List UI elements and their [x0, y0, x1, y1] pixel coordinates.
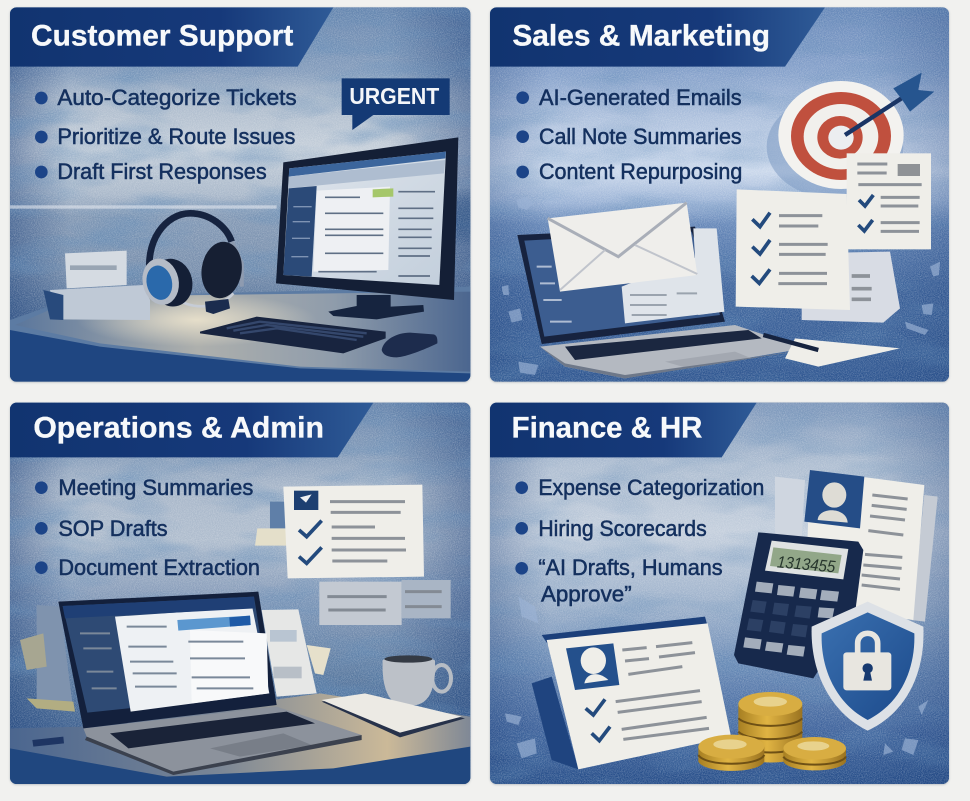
title: Customer Support — [31, 20, 294, 53]
icon: shield with padlock — [812, 602, 924, 731]
icon: pen — [763, 335, 818, 350]
icon: resume document — [775, 470, 938, 622]
icon: calculator: 1313455 — [776, 552, 837, 576]
icon: mouse — [382, 333, 437, 357]
panel: Customer Support — [10, 7, 490, 382]
title: Finance & HR — [512, 411, 702, 444]
bullet list: Draft First Responses — [57, 159, 267, 184]
icon: monitor — [276, 137, 458, 319]
icon: small checklist card — [847, 153, 931, 249]
bullet list: Prioritize & Route Issues — [57, 124, 295, 149]
bullet list: Approve” — [541, 582, 632, 607]
bullet list — [515, 475, 764, 607]
bullet list: Auto-Categorize Tickets — [57, 85, 297, 110]
stacked boxes — [43, 251, 150, 320]
panel: Operations & Admin — [10, 403, 470, 784]
bullet list — [516, 85, 742, 184]
header banner — [490, 403, 757, 457]
icon: envelope — [548, 203, 724, 315]
background flecks — [502, 197, 940, 375]
panel: Finance & HR — [490, 403, 949, 784]
bullet list: AI-Generated Emails — [539, 85, 742, 110]
bullet list: Expense Categorization — [538, 475, 764, 500]
bullet list: Hiring Scorecards — [538, 516, 707, 541]
title: Operations & Admin — [33, 411, 324, 444]
icon: checklist card — [283, 485, 424, 578]
icon: headset — [138, 213, 245, 314]
bullet list — [35, 475, 260, 580]
bullet list — [35, 85, 297, 184]
icon: laptop — [58, 592, 362, 775]
icon: notebook — [322, 693, 465, 737]
sticky note — [255, 502, 290, 546]
header banner — [10, 403, 373, 457]
icon: scorecard — [532, 617, 731, 769]
urgent speech bubble — [342, 78, 450, 130]
urgent speech bubble: URGENT — [349, 83, 439, 109]
icon: target with arrow — [767, 73, 934, 198]
panel: Sales & Marketing — [490, 7, 949, 382]
icon: laptop — [517, 227, 805, 378]
header banner — [490, 7, 825, 67]
bullet list: “AI Drafts, Humans — [538, 555, 723, 580]
background flecks — [505, 597, 928, 758]
bullet list: Call Note Summaries — [539, 124, 742, 149]
icon: gold coins — [698, 692, 846, 771]
bullet list: Meeting Summaries — [58, 475, 253, 500]
desk — [10, 287, 470, 382]
usb stick — [32, 737, 64, 747]
icon: paper under pen — [785, 338, 900, 367]
icon: large checklist card — [736, 189, 850, 310]
bullet list: Document Extraction — [58, 555, 260, 580]
icon: calculator — [734, 532, 863, 678]
header banner — [10, 7, 333, 67]
title: Sales & Marketing — [512, 20, 770, 53]
icon: back note cards — [319, 580, 451, 625]
bullet list: Content Repurposing — [539, 159, 742, 184]
icon: keyboard — [200, 317, 386, 353]
desk — [10, 693, 470, 784]
icon: coffee cup — [383, 655, 451, 705]
stacked papers — [20, 605, 331, 712]
icon: back checklist page — [802, 252, 900, 323]
bullet list: SOP Drafts — [58, 516, 168, 541]
